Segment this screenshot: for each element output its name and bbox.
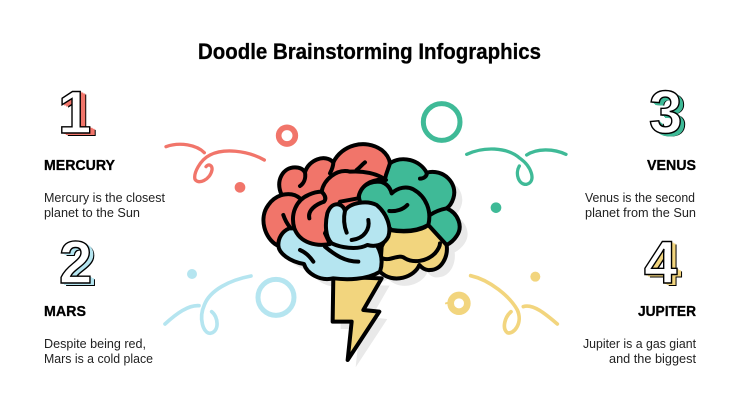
- blue lower lobes: [278, 228, 382, 279]
- brain with lightning bolt: [263, 144, 468, 367]
- doodle: green swirl: [423, 104, 566, 213]
- text block: venus: VENUS: [647, 157, 696, 174]
- doodle: red swirl: [166, 127, 295, 193]
- number 2: 2: [59, 229, 92, 296]
- text block: mars: Despite being red,: [44, 337, 146, 351]
- text block: jupiter: and the biggest: [609, 352, 697, 366]
- doodle: yellow swirl: [446, 272, 557, 333]
- text block: mars: Mars is a cold place: [44, 352, 153, 366]
- yellow lobes: [380, 225, 447, 278]
- text block: mercury: MERCURY: [44, 157, 115, 174]
- text block: mars: MARS: [44, 303, 86, 320]
- brain shadow: [271, 151, 468, 367]
- text block: mercury: [44, 157, 166, 220]
- text block: jupiter: Jupiter is a gas giant: [583, 337, 697, 351]
- number 1: 1: [58, 79, 91, 146]
- green lobes: [359, 159, 460, 245]
- text block: mercury: Mercury is the closest: [44, 191, 166, 205]
- text block: mars: [44, 303, 153, 366]
- number 3: 3: [649, 79, 682, 146]
- number 4: 4: [644, 229, 677, 296]
- title: Doodle Brainstorming Infographics: [198, 39, 541, 64]
- text block: jupiter: [583, 303, 697, 366]
- text block: jupiter: JUPITER: [638, 303, 696, 320]
- red front lobes: [293, 171, 386, 245]
- red back lobes: [263, 144, 390, 245]
- text block: venus: planet from the Sun: [585, 206, 696, 220]
- text block: mercury: planet to the Sun: [44, 206, 140, 220]
- text block: venus: Venus is the second: [585, 191, 695, 205]
- lightning bolt: [333, 277, 382, 360]
- text block: venus: [585, 157, 696, 220]
- blue top lobes: [326, 202, 389, 248]
- doodle: blue swirl: [165, 269, 294, 333]
